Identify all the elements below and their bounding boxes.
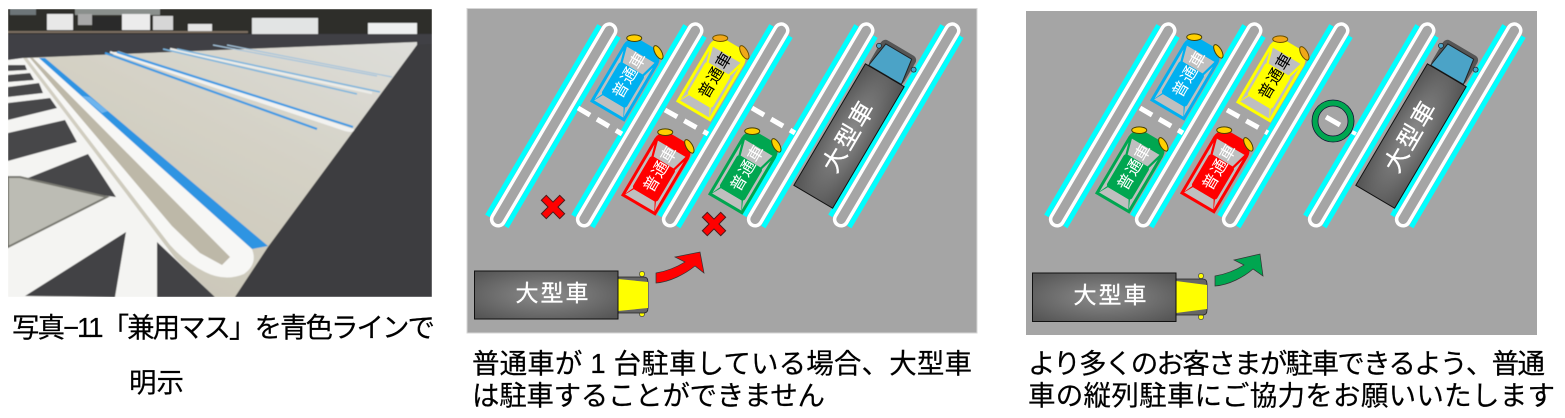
parking slot lines [483, 18, 967, 232]
waiting large truck: 大型車 [516, 280, 590, 306]
left white markings [8, 58, 215, 297]
car: blue [1148, 27, 1229, 122]
caption: panel 2: 車の縦列駐車にご協力をお願いいたします [1028, 380, 1555, 411]
car: red: 普通車 [1199, 141, 1241, 194]
photo: parking bays with blue lines [8, 9, 432, 297]
parked large truck: 大型車 [1380, 95, 1443, 177]
parked large truck: 大型車 [818, 95, 881, 177]
car: green [706, 121, 787, 216]
car: green: 普通車 [1114, 141, 1156, 194]
parked large truck [1356, 37, 1484, 209]
blue lines: other bays [110, 52, 353, 131]
concrete bay surface [8, 42, 417, 297]
caption: panel 1: 普通車が 1 台駐車している場合、大型車 [472, 348, 972, 379]
car: yellow [674, 28, 755, 123]
parked large truck [794, 37, 922, 209]
photo caption: 明示 [129, 367, 184, 398]
arrow: red [656, 252, 704, 283]
background trees and vehicles [8, 9, 432, 35]
right asphalt [244, 46, 418, 283]
photo caption [12, 312, 435, 398]
car: yellow: 普通車 [695, 49, 737, 102]
caption: panel 2 [1028, 348, 1555, 411]
car: green [1093, 120, 1174, 215]
car: blue: 普通車 [609, 49, 651, 102]
gutter [30, 58, 230, 265]
car: red: 普通車 [640, 143, 682, 196]
car: yellow: 普通車 [1255, 50, 1297, 103]
car: green: 普通車 [727, 142, 769, 195]
caption: panel 2: より多くのお客さまが駐車できるよう、普通 [1028, 348, 1545, 379]
car: blue [588, 28, 669, 123]
dashed tandem dividers [1140, 108, 1268, 133]
car: yellow [1234, 29, 1315, 124]
parking slot lines [1042, 18, 1529, 232]
panel: large truck blocked [467, 8, 977, 333]
cross mark: truck path [696, 206, 732, 242]
car: blue: 普通車 [1169, 48, 1211, 101]
waiting large truck [474, 271, 648, 319]
cross mark: empty slot [535, 189, 571, 225]
panel: tandem parking [1026, 11, 1537, 335]
caption: panel 1 [472, 348, 972, 411]
caption: panel 1: は駐車することができません [472, 380, 825, 411]
dashed tandem dividers [578, 108, 795, 134]
photo caption: 写真−11「兼用マス」を青色ラインで [12, 312, 435, 343]
car: red [1178, 120, 1259, 215]
arrow: green [1215, 254, 1263, 286]
circle mark: OK [1312, 100, 1356, 142]
white edge line with rounded end [27, 58, 254, 278]
waiting large truck: 大型車 [1074, 282, 1148, 308]
waiting large truck [1032, 273, 1207, 322]
blue line: main [39, 58, 268, 249]
car: red [619, 122, 700, 217]
